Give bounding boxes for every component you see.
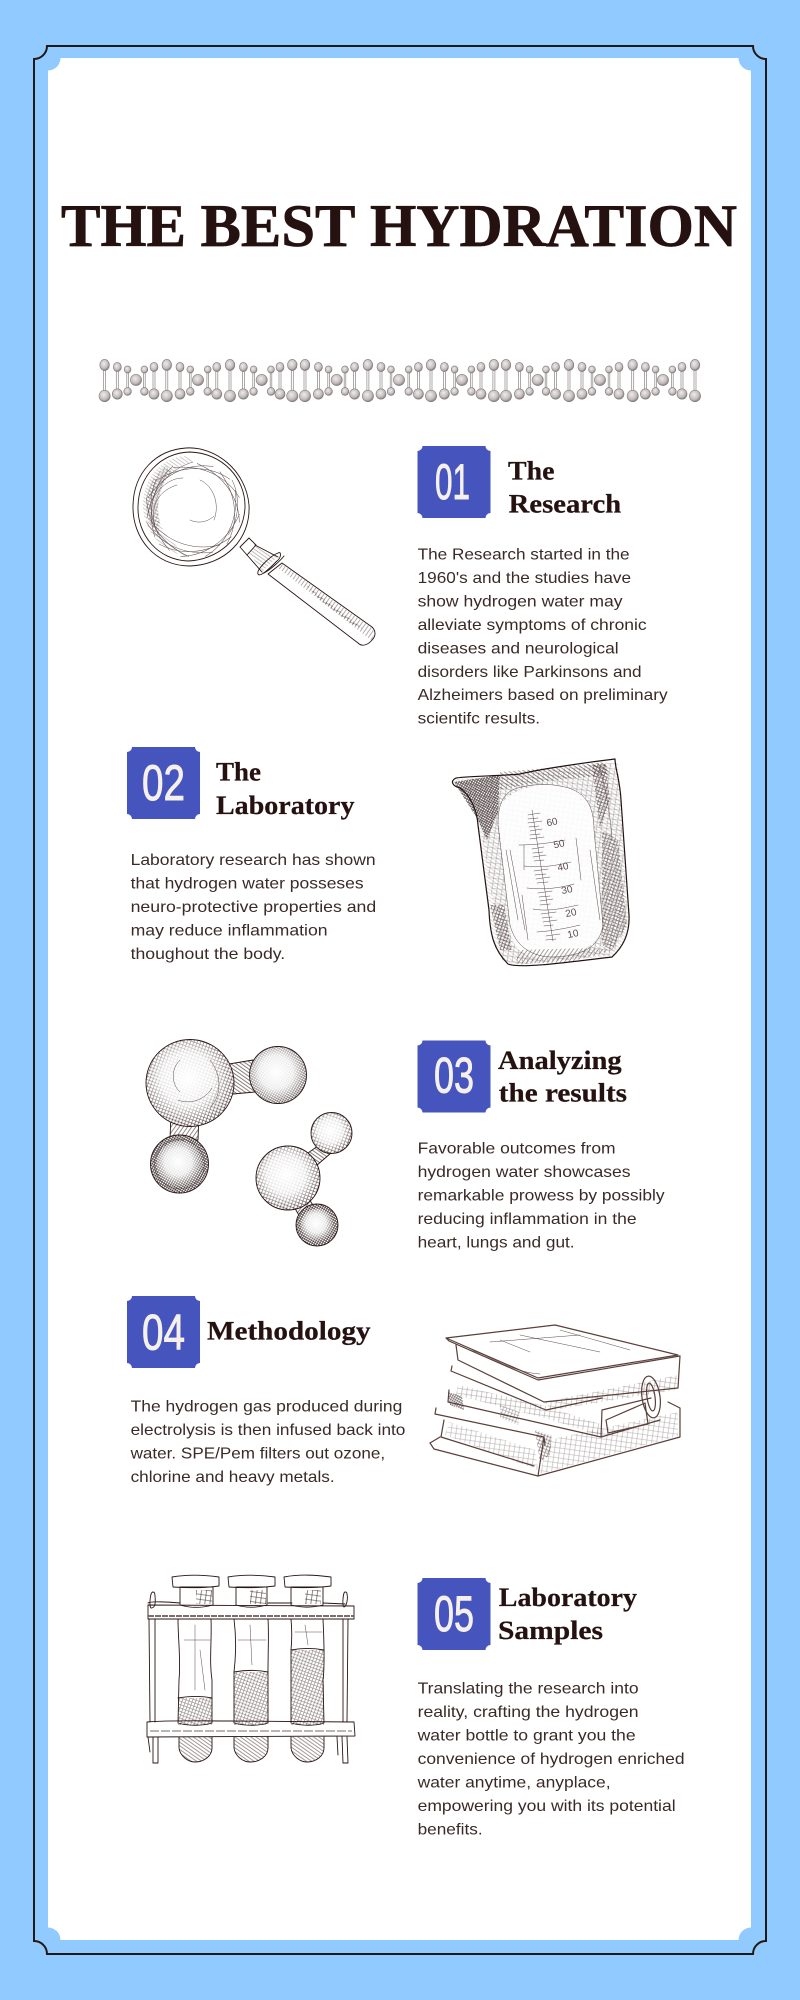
body text: analyzing: Favorable outcomes from: [418, 1140, 616, 1157]
body text: samples: reality, crafting the hydrogen: [418, 1704, 639, 1721]
icon: measuring beaker: 10: [567, 928, 580, 941]
heading: Laboratory Samples: [498, 1582, 637, 1645]
section 1: the research: [127, 444, 668, 728]
body text: research: show hydrogen water may: [418, 593, 623, 610]
body text: laboratory: Laboratory research has shown: [131, 852, 376, 869]
heading: Analyzing the results: Analyzing: [498, 1045, 622, 1075]
heading: The Research: The: [508, 456, 555, 486]
body text: analyzing: hydrogen water showcases: [418, 1164, 631, 1181]
body text: laboratory: thoughout the body.: [131, 946, 285, 963]
heading: Laboratory Samples: Laboratory: [499, 1582, 637, 1612]
body text: analyzing: reducing inflammation in the: [418, 1211, 637, 1228]
heading: The Research: [508, 456, 621, 519]
body text: samples: [417, 1680, 685, 1838]
body text: laboratory: may reduce inflammation: [131, 922, 328, 940]
number badge 05: 05: [434, 1586, 474, 1642]
number badge 03: 03: [434, 1048, 474, 1104]
body text: research: alleviate symptoms of chronic: [418, 617, 647, 634]
icon: stack of books: [430, 1325, 680, 1476]
body text: laboratory: [131, 852, 376, 963]
body text: samples: benefits.: [418, 1821, 483, 1838]
number badge 04: [127, 1296, 200, 1368]
body text: research: [418, 546, 668, 728]
icon: measuring beaker: 40: [557, 861, 570, 874]
body text: research: diseases and neurological: [418, 640, 619, 657]
section 2: the laboratory: [127, 747, 629, 966]
body text: laboratory: that hydrogen water posseses: [131, 876, 364, 892]
section 5: laboratory samples: [147, 1575, 685, 1838]
number badge 04: 04: [142, 1304, 185, 1360]
icon: magnifying glass: [127, 444, 375, 645]
body text: samples: Translating the research into: [418, 1680, 639, 1697]
icon: molecules: [146, 1040, 352, 1246]
icon: measuring beaker: 30: [561, 884, 574, 897]
body text: methodology: The hydrogen gas produced during: [131, 1399, 402, 1416]
body text: research: disorders like Parkinsons and: [418, 664, 642, 681]
body text: samples: water bottle to grant you the: [417, 1727, 636, 1744]
heading: The Laboratory: Laboratory: [216, 790, 354, 820]
title: HYDRATION: [370, 193, 737, 260]
body text: analyzing: [418, 1140, 665, 1251]
icon: test tube rack: [147, 1575, 355, 1763]
body text: laboratory: neuro-protective properties and: [131, 899, 376, 916]
number badge 02: 02: [142, 755, 185, 811]
body text: methodology: chlorine and heavy metals.: [131, 1469, 335, 1486]
title: BEST: [200, 193, 356, 260]
body text: methodology: electrolysis is then infused back into: [131, 1422, 406, 1439]
body text: analyzing: heart, lungs and gut.: [418, 1234, 575, 1251]
section 4: methodology: [127, 1296, 680, 1486]
icon: measuring beaker: 60: [546, 816, 559, 829]
icon: measuring beaker: 20: [565, 907, 578, 920]
heading: The Laboratory: [216, 757, 354, 820]
body text: methodology: [130, 1399, 406, 1486]
body text: research: 1960's and the studies have: [418, 570, 631, 587]
body text: research: The Research started in the: [418, 546, 630, 564]
icon: measuring beaker: [453, 759, 629, 966]
icon: measuring beaker: 50: [553, 838, 566, 851]
heading: Laboratory Samples: Samples: [498, 1615, 603, 1645]
number badge 01: [418, 446, 490, 518]
body text: research: scientifc results.: [418, 711, 540, 728]
heading: Analyzing the results: the results: [499, 1078, 627, 1108]
number badge 05: [418, 1578, 490, 1650]
title: [61, 193, 737, 260]
title: THE: [61, 193, 186, 260]
number badge 01: 01: [435, 454, 470, 510]
heading: Methodology: Methodology: [207, 1315, 371, 1345]
DNA strand divider: [99, 359, 701, 402]
body text: analyzing: remarkable prowess by possibly: [418, 1187, 665, 1204]
heading: The Laboratory: The: [216, 757, 261, 787]
section 3: analyzing the results: [146, 1040, 665, 1251]
number badge 03: [418, 1040, 490, 1112]
heading: The Research: Research: [509, 489, 621, 519]
heading: Analyzing the results: [498, 1045, 627, 1108]
body text: research: Alzheimers based on preliminary: [418, 687, 668, 704]
body text: methodology: water. SPE/Pem filters out ozone,: [130, 1446, 385, 1463]
body text: samples: water anytime, anyplace,: [417, 1774, 611, 1791]
number badge 02: [127, 747, 200, 819]
body text: samples: empowering you with its potential: [418, 1798, 676, 1815]
body text: samples: convenience of hydrogen enriched: [418, 1751, 685, 1768]
